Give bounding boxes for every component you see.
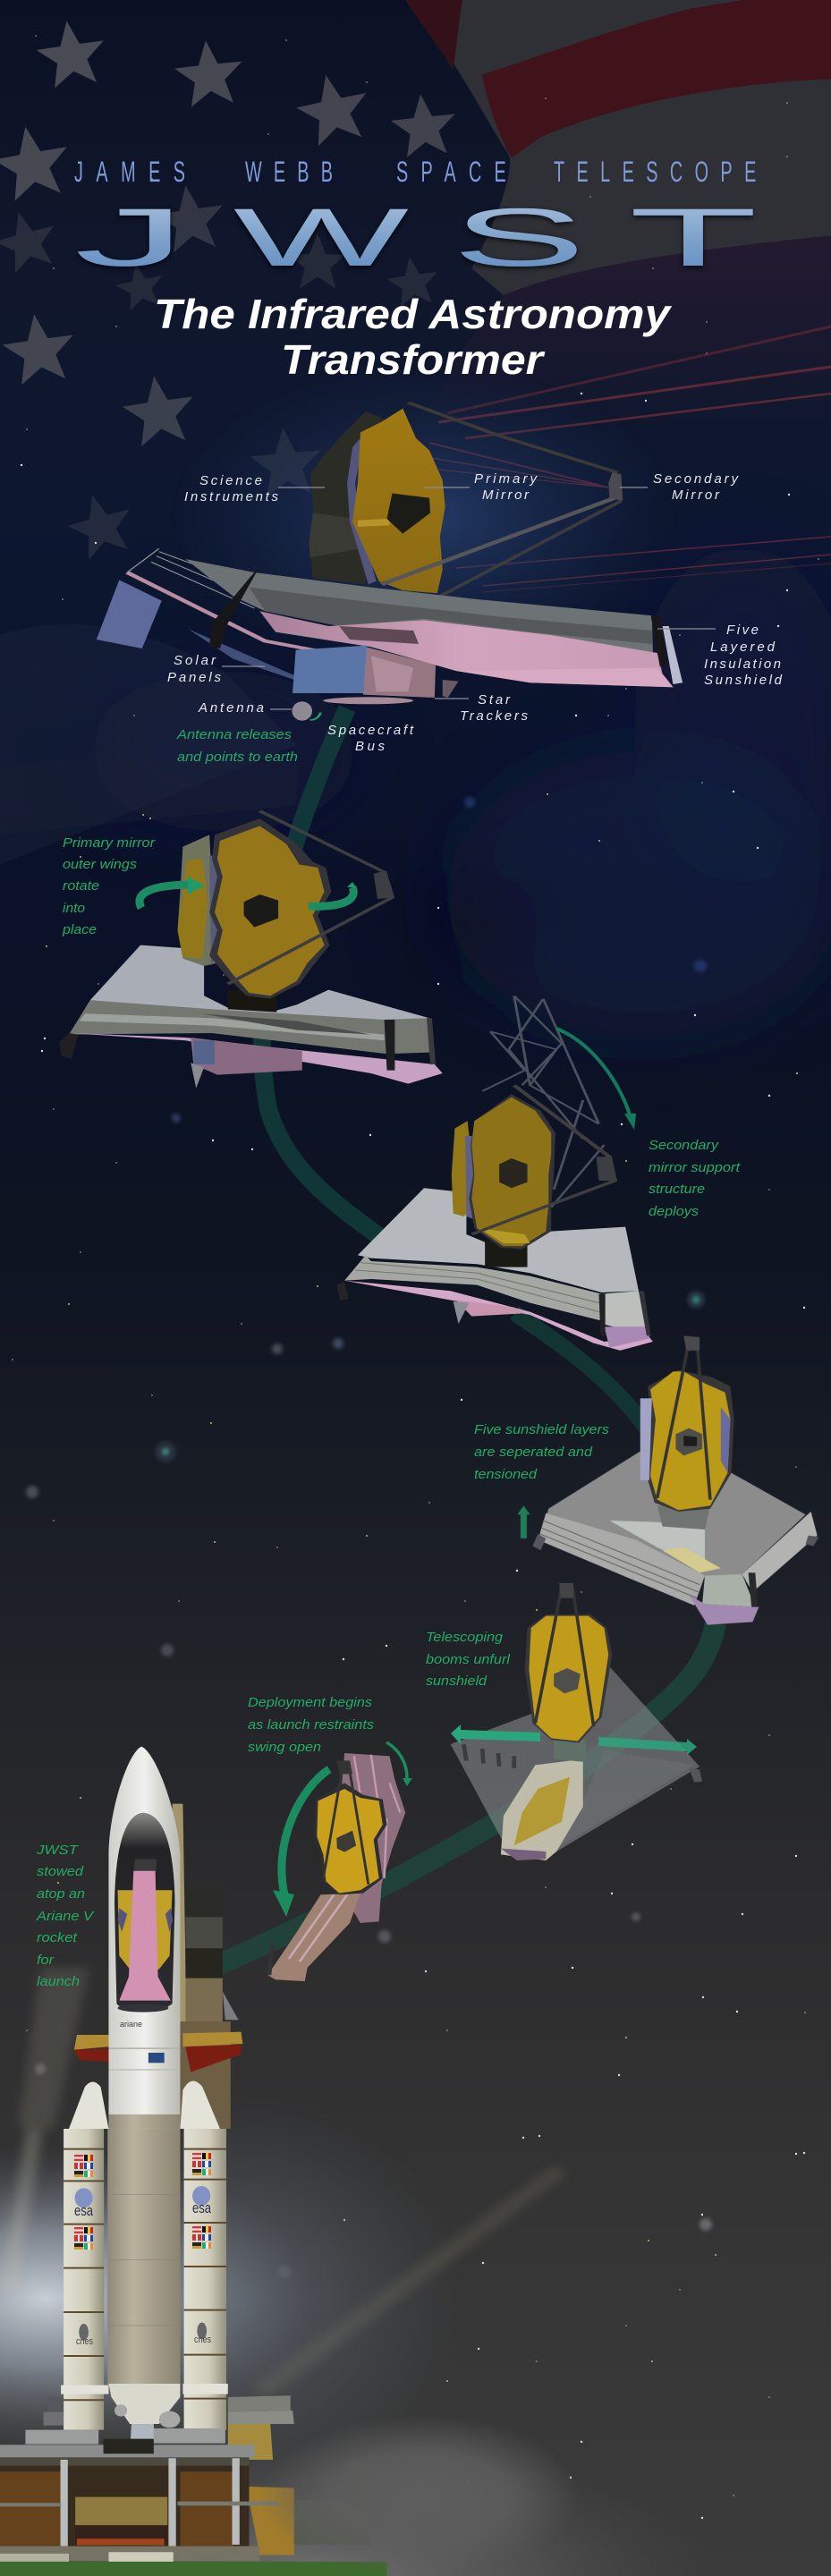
platform pipes <box>0 2445 254 2458</box>
label: primary mirror: Mirror <box>482 487 530 503</box>
label: solar panels <box>167 653 222 685</box>
stowed JWST mirror <box>118 1890 173 1970</box>
sunshield pink <box>69 1033 443 1084</box>
step text: primary mirror outer wings: Primary mirror <box>63 835 156 851</box>
telescope 5: telescoping booms unfurl <box>451 1583 702 1860</box>
telescope 3: secondary mirror support deploys <box>336 996 653 1351</box>
arrows: restraints swing open <box>273 1742 412 1917</box>
mirror baffle <box>244 894 278 928</box>
grass <box>0 2562 387 2576</box>
stowed sunshield pink <box>334 1753 405 1923</box>
step text: telescoping booms: sunshield <box>426 1674 488 1689</box>
infrared light beams <box>420 326 831 592</box>
sunshield end bars <box>209 566 259 648</box>
telescope 4: sunshield tensioned <box>517 1335 818 1625</box>
deployment path arcs <box>201 708 716 1972</box>
booster logo text: esa <box>192 2199 211 2216</box>
step text: five sunshield layers: are seperated and <box>474 1445 593 1460</box>
shield end bars <box>59 1033 78 1059</box>
step text: JWST stowed <box>36 1843 95 1989</box>
cnes logos <box>79 2324 89 2341</box>
struts <box>471 1085 615 1234</box>
fairing <box>108 1747 180 2129</box>
header: James Webb Space Telescope: TELESCOPE <box>554 156 756 188</box>
step text: telescoping booms: booms unfurl <box>426 1652 511 1667</box>
label: secondary mirror: Mirror <box>672 487 720 503</box>
mirror wing <box>640 1398 652 1480</box>
step text: antenna releases: and points to earth <box>177 750 298 765</box>
sunshield pink underside <box>259 611 673 687</box>
struts <box>323 1771 369 1885</box>
step text: JWST stowed: rocket <box>37 1930 78 1945</box>
tower <box>554 1740 586 1762</box>
solar panel <box>97 580 162 648</box>
mirror wing left <box>177 835 217 966</box>
background: launch pad sky glow and fog <box>0 1968 716 2576</box>
antenna arrow <box>310 713 320 720</box>
primary mirror <box>352 409 445 593</box>
translucent sunshield <box>451 1661 700 1852</box>
label: primary mirror <box>474 471 538 503</box>
left access platform <box>74 2035 108 2050</box>
fairing ring <box>118 2004 168 2012</box>
science instruments <box>309 411 387 584</box>
dark background behind skirts <box>47 2397 64 2415</box>
booster ties <box>61 2385 108 2394</box>
step text: primary mirror outer wings: place <box>62 922 97 937</box>
tower <box>657 1505 710 1530</box>
mirror baffle <box>387 494 430 534</box>
step text: secondary mirror support <box>649 1138 741 1219</box>
booster logo text: esa <box>74 2202 93 2219</box>
step text: deployment begins: Deployment begins <box>248 1695 373 1710</box>
header: JWST big letters: S <box>452 192 586 284</box>
label: star trackers <box>460 692 528 724</box>
stowed JWST sunshield <box>119 1871 171 2001</box>
step text: telescoping booms: Telescoping <box>426 1630 504 1645</box>
sunshield top <box>358 1188 639 1292</box>
primary mirror frame <box>209 818 331 999</box>
label: spacecraft bus: Spacecraft <box>327 723 414 738</box>
subtitle: The Infrared Astronomy Transformer <box>154 291 673 383</box>
step text: JWST stowed: stowed <box>37 1864 84 1879</box>
primary mirror <box>529 1616 608 1741</box>
mirror frame <box>314 1783 387 1894</box>
step text: secondary mirror support: structure <box>649 1182 705 1197</box>
concrete base <box>0 2546 259 2561</box>
centre gold panel <box>75 2497 167 2525</box>
step text: telescoping booms <box>426 1630 511 1689</box>
struts <box>228 811 392 984</box>
lower sunshield <box>267 1894 360 1981</box>
ribbed rings <box>25 2430 98 2445</box>
sunshield surface <box>546 1449 806 1577</box>
step text: JWST stowed: for <box>37 1953 55 1968</box>
label: star trackers: Star <box>478 692 511 708</box>
Ariane 5 rocket upper <box>69 1747 220 2129</box>
tan core start <box>108 2114 180 2129</box>
header: JWST big letters: T <box>629 192 758 284</box>
spacecraft bus <box>363 647 436 698</box>
booster logo text <box>74 2020 211 2347</box>
lower structure <box>0 2466 249 2546</box>
arrows: booms unfurl <box>451 1724 697 1755</box>
baffle <box>336 1831 356 1852</box>
right booster <box>184 2129 226 2430</box>
Ariane 5 launch tower <box>73 1804 242 2129</box>
label: solar panels: Solar <box>174 653 216 668</box>
folded sunshield stack <box>501 1759 583 1860</box>
header: JWST big letters: J <box>74 192 187 284</box>
baffle <box>499 1158 528 1188</box>
step text: deployment begins: as launch restraints <box>248 1717 375 1733</box>
label: solar panels: Panels <box>167 670 222 685</box>
step text: antenna releases: Antenna releases <box>176 727 293 742</box>
label: five layered insulation sunshield: Layered <box>710 640 776 655</box>
arrow: secondary support deploys <box>556 1029 636 1130</box>
spacecraft bus <box>456 1300 525 1317</box>
baffle <box>554 1668 581 1693</box>
step text: JWST stowed: JWST <box>36 1843 80 1858</box>
label: spacecraft bus <box>327 723 414 754</box>
support columns <box>61 2458 240 2546</box>
primary mirror backplane strip <box>347 432 377 584</box>
background: blurred bokeh stars <box>26 797 712 2278</box>
antenna <box>292 701 312 721</box>
step text: JWST stowed: atop an <box>37 1886 85 1902</box>
primary mirror <box>469 1094 555 1250</box>
label: five layered insulation sunshield: Sunshield <box>704 673 783 688</box>
label: five layered insulation sunshield <box>704 623 783 688</box>
background: flag stars <box>0 16 459 563</box>
tree <box>339 2458 377 2509</box>
telescope 2: primary mirror wings rotate <box>59 811 443 1089</box>
telescope 6: launch restraints swing open <box>267 1753 405 1981</box>
background: nebula clouds <box>89 546 831 1038</box>
left booster <box>64 2129 104 2430</box>
background: American flag stripes <box>0 0 831 865</box>
right tower sections <box>228 2395 291 2412</box>
step text: JWST stowed: launch <box>37 1974 80 1989</box>
secondary mirror struts <box>408 402 617 472</box>
arrow up <box>517 1505 530 1538</box>
mirror frame <box>647 1370 734 1512</box>
fairing opening <box>114 1813 175 2010</box>
label: five layered insulation sunshield: Five <box>726 623 759 638</box>
header: JWST big letters: W <box>233 192 409 284</box>
boosters tops <box>69 2081 108 2129</box>
arrows: mirror wings rotate <box>140 877 356 908</box>
label: science instruments: Instruments <box>184 489 279 504</box>
label: secondary mirror <box>653 471 739 503</box>
tower <box>485 1241 528 1267</box>
Ariane 5 rocket lower: boosters, core and launch table <box>0 2129 387 2576</box>
subtitle: The Infrared Astronomy Transformer: Transformer <box>281 336 545 383</box>
label: antenna: Antenna <box>198 700 264 716</box>
esa logos <box>75 2188 93 2207</box>
step text: deployment begins: swing open <box>248 1740 321 1755</box>
booster logo text: cnes <box>194 2334 211 2345</box>
booster logo text: cnes <box>76 2336 93 2347</box>
label: primary mirror: Primary <box>474 471 538 487</box>
step text: five sunshield layers: tensioned <box>474 1467 538 1482</box>
primary mirror <box>650 1371 730 1510</box>
mirror wing <box>452 1121 477 1216</box>
booster logo text: ariane <box>120 2020 142 2029</box>
ghost secondary struts <box>482 996 604 1208</box>
sunshield grey layers <box>185 559 653 653</box>
step text: secondary mirror support: mirror support <box>649 1160 741 1175</box>
header: James Webb Space Telescope: WEBB <box>245 156 333 188</box>
booster bands <box>64 2149 226 2400</box>
step text: JWST stowed: Ariane V <box>36 1909 95 1924</box>
core stage <box>107 2129 180 2385</box>
right fold <box>601 1291 649 1335</box>
step text: primary mirror outer wings <box>62 835 156 937</box>
step text: five sunshield layers <box>474 1422 610 1482</box>
header: JWST big letters <box>74 192 758 284</box>
primary mirror <box>215 826 325 996</box>
flags on boosters <box>74 2153 211 2250</box>
sunshield folds <box>538 1513 705 1606</box>
tower base <box>228 990 276 1013</box>
baffle <box>675 1428 702 1455</box>
spacecraft bus <box>191 1038 302 1075</box>
crossbar <box>0 2503 61 2506</box>
step text: deployment begins <box>248 1695 375 1755</box>
step text: secondary mirror support: deploys <box>649 1204 700 1219</box>
label: science instruments: Science <box>199 473 262 488</box>
struts <box>657 1342 710 1500</box>
subtitle: The Infrared Astronomy Transformer: The Infrared Astronomy <box>154 291 673 337</box>
step text: primary mirror outer wings: into <box>63 901 85 916</box>
sunshield booms left <box>127 572 328 653</box>
core base funnel <box>108 2384 180 2424</box>
step text: primary mirror outer wings: rotate <box>63 878 99 894</box>
sunshield layers <box>344 1255 601 1321</box>
struts <box>535 1586 594 1726</box>
upper stage bands <box>108 2047 180 2049</box>
label: secondary mirror: Secondary <box>653 471 739 487</box>
sunshield underside <box>689 1595 759 1625</box>
header: James Webb Space Telescope <box>74 156 756 188</box>
sunshield pink <box>344 1281 653 1351</box>
right access platform <box>182 2032 242 2046</box>
label: spacecraft bus: Bus <box>355 739 385 754</box>
primary mirror <box>317 1789 383 1894</box>
step text: secondary mirror support: Secondary <box>649 1138 720 1153</box>
fog over launch site right edge <box>259 2415 581 2576</box>
sunshield top <box>90 945 429 1022</box>
mirror frame <box>525 1614 612 1742</box>
telescope 1: fully deployed with labels <box>97 364 683 721</box>
step text: five sunshield layers: Five sunshield layers <box>474 1422 610 1437</box>
label: star trackers: Trackers <box>460 708 528 724</box>
leader lines <box>222 487 716 709</box>
sunshield base <box>501 1849 546 1860</box>
step text: primary mirror outer wings: outer wings <box>63 857 138 872</box>
sunshield layers <box>69 1000 429 1054</box>
end bars <box>336 1282 349 1301</box>
halo behind mirror <box>170 364 678 674</box>
secondary mirror <box>608 472 623 501</box>
header: James Webb Space Telescope: JAMES <box>74 156 185 188</box>
label: five layered insulation sunshield: Insulation <box>704 657 781 672</box>
step text: antenna releases <box>176 727 298 765</box>
label: science instruments <box>184 473 279 504</box>
header: James Webb Space Telescope: SPACE <box>396 156 506 188</box>
